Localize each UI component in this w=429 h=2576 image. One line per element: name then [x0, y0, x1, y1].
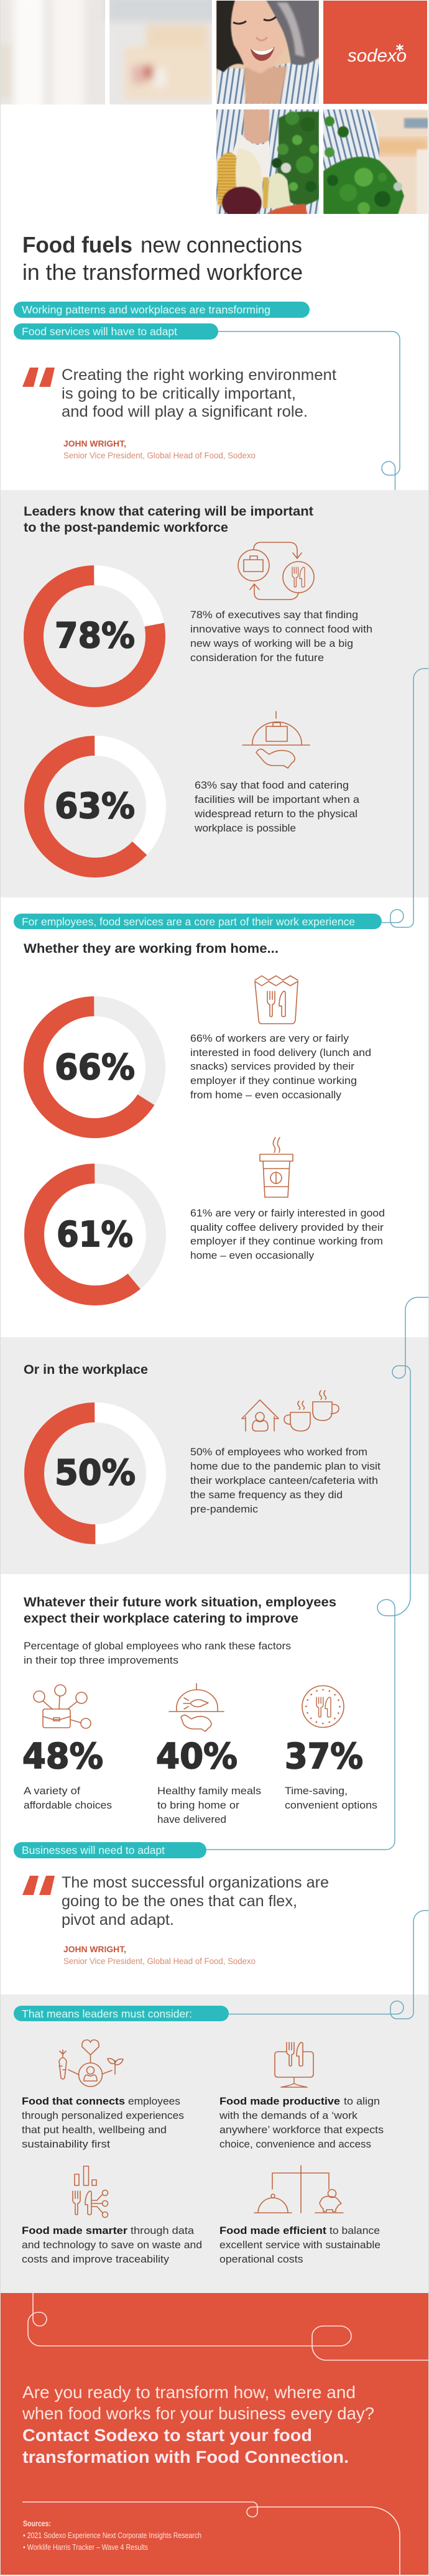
text: food made productive: [219, 2095, 384, 2150]
main title: new connections: [141, 232, 302, 257]
text: 50% of employees: the same frequency as they did: [190, 1489, 343, 1501]
text: 61% are very: employer if they continue working from: [190, 1235, 383, 1247]
text: 50% of employees: [190, 1446, 381, 1515]
photo tile: herbs and kitchen background: [323, 109, 429, 218]
text: food that connects: sustainability first: [22, 2138, 110, 2150]
text: food that connects: Food that connects: [22, 2095, 125, 2107]
logo tile: sodexo: [323, 1, 427, 104]
icon: home and coffee cups: [242, 1391, 339, 1431]
donut chart: 66%: 66%: [55, 1047, 135, 1088]
heading: or in the workplace: Or in the workplace: [24, 1363, 148, 1377]
text: 61% are very: [190, 1207, 385, 1261]
pill: food services: Food services will have to adapt: [22, 325, 177, 338]
donut chart: 63%: 63%: [55, 786, 135, 827]
text: 78% of executives: new ways of working will be a big: [190, 637, 353, 649]
text: 66% of workers: [190, 1032, 371, 1101]
panel: call to action: [1, 2293, 428, 2575]
text: percentage description: [24, 1640, 291, 1666]
stat: 40%: [156, 1684, 261, 1825]
connector line: top of call to action: [28, 2293, 428, 2360]
text: sources: [23, 2519, 201, 2552]
pill: employees: For employees, food services are a core part of their work experience: [22, 915, 355, 928]
text: food made productive: Food made productive: [219, 2095, 340, 2107]
text: food that connects: employees: [128, 2095, 180, 2107]
main title: Food fuels: [22, 232, 132, 257]
stat: 37%: 37%: [285, 1736, 363, 1777]
text: 63% say: workplace is possible: [194, 822, 296, 834]
text: food made efficient: excellent service with sustainable: [219, 2239, 381, 2251]
stat: 40%: Healthy family meals: [157, 1785, 261, 1797]
donut chart: 61%: 61%: [57, 1215, 133, 1255]
text: 63% say: [194, 779, 360, 834]
pill: working patterns: Working patterns and workplaces are transforming: [22, 303, 270, 316]
text: food made smarter: [22, 2225, 202, 2265]
text: call to action: [22, 2383, 374, 2467]
text: food made smarter: Food made smarter: [22, 2225, 127, 2236]
photo grid: woman holding fresh vegetables: [0, 0, 429, 219]
icon: plate with cutlery: [302, 1685, 344, 1728]
text: food that connects: through personalized experiences: [22, 2110, 184, 2121]
text: food made smarter: and technology to save on waste and: [22, 2239, 202, 2251]
text: food made efficient: [219, 2225, 381, 2265]
text: sources: Sources:: [23, 2519, 51, 2528]
text: call to action: when food works for your business every day?: [22, 2404, 374, 2423]
text: 63% say: widespread return to the physical: [194, 808, 358, 820]
connector line: to employees pill: [382, 669, 429, 927]
connector line: quote to leaders section: [218, 331, 429, 543]
text: 66% of workers: 66% of workers are very or fairly: [190, 1032, 349, 1044]
pill: leaders must consider: That means leaders must consider:: [22, 2008, 192, 2020]
photo tile: smiling woman: [216, 0, 319, 106]
text: food made smarter: costs and improve traceability: [22, 2253, 170, 2265]
icon: quote mark: [22, 1876, 55, 1895]
icon: carrot under cloche: [169, 1684, 224, 1731]
text: 78% of executives: 78% of executives say that finding: [190, 609, 358, 621]
quote 2: going to be the ones that can flex,: [62, 1893, 297, 1910]
stat: 48%: affordable choices: [24, 1799, 112, 1811]
quote 2: Senior Vice President, Global Head of Food, Sodexo: [63, 1956, 256, 1966]
pill: businesses: [14, 1842, 206, 1858]
donut chart: 63%: [34, 746, 156, 868]
photo tile: curtain: [1, 0, 105, 104]
text: 50% of employees: their workplace canteen/cafeteria with: [190, 1475, 378, 1486]
heading: leaders: Leaders know that catering will be important: [24, 504, 313, 519]
quote 1: and food will play a significant role.: [62, 403, 308, 420]
text: sources: • Worklife Harris Tracker – Wave 4 Results: [23, 2543, 148, 2552]
text: sources: • 2021 Sodexo Experience Next Corporate Insights Research: [23, 2531, 201, 2540]
text: percentage description: in their top three improvements: [24, 1654, 178, 1666]
text: food made productive: with the demands of a ‘work: [219, 2110, 358, 2121]
quote 2: [22, 1874, 329, 1966]
quote 1: is going to be critically important,: [62, 385, 296, 402]
text: 66% of workers: from home – even occasionally: [190, 1089, 342, 1101]
icon: work and food exchange: [238, 542, 314, 600]
connector line: workplace to businesses pill: [206, 1297, 429, 1850]
heading: leaders: to the post-pandemic workforce: [24, 521, 228, 535]
text: 66% of workers: snacks) services provided by their: [190, 1060, 354, 1072]
quote 2: The most successful organizations are: [62, 1874, 329, 1891]
text: 61% are very: 61% are very or fairly interested in good: [190, 1207, 385, 1219]
icon: food bag: [255, 976, 298, 1024]
icon: person with heart, carrot and sprout: [59, 2040, 123, 2087]
donut chart: 50%: [34, 1412, 156, 1534]
text: 78% of executives: innovative ways to connect food with: [190, 623, 372, 635]
text: food that connects: [22, 2095, 184, 2150]
text: 61% are very: home – even occasionally: [190, 1249, 314, 1261]
stat: 37%: Time-saving,: [285, 1785, 348, 1797]
stat: 40%: to bring home or: [157, 1799, 239, 1811]
stat: 48%: A variety of: [24, 1785, 80, 1797]
stat: 40%: 40%: [156, 1736, 238, 1777]
icon: briefcase network: [34, 1685, 91, 1728]
text: 63% say: facilities will be important when a: [195, 794, 360, 805]
text: 50% of employees: 50% of employees who worked from: [190, 1446, 367, 1458]
icon: bars and smart cutlery: [73, 2166, 108, 2218]
stat: 37%: convenient options: [285, 1799, 377, 1811]
photo tile: vegetables in arms: [216, 109, 319, 219]
donut chart: 66%: [34, 1006, 155, 1128]
donut chart: 78%: 78%: [55, 616, 135, 656]
icon: balance scale with cloche and piggy bank: [254, 2166, 343, 2213]
logo tile: sodexo: sodexo: [348, 46, 407, 66]
quote 1: Senior Vice President, Global Head of Food, Sodexo: [63, 450, 256, 460]
quote 1: JOHN WRIGHT,: [63, 438, 126, 448]
text: food that connects: that put health, wellbeing and: [22, 2124, 167, 2136]
quote 2: pivot and adapt.: [62, 1911, 174, 1929]
text: food made productive: anywhere’ workforce that expects: [219, 2124, 384, 2136]
donut chart: 61%: [34, 1174, 156, 1295]
text: 78% of executives: consideration for the future: [190, 652, 324, 664]
quote 2: JOHN WRIGHT,: [63, 1944, 126, 1954]
text: 50% of employees: pre-pandemic: [190, 1503, 259, 1515]
main title: in the transformed workforce: [22, 259, 303, 285]
heading: future work situation: [24, 1595, 336, 1626]
quote 1: Creating the right working environment: [62, 366, 336, 384]
text: 78% of executives: [190, 609, 372, 664]
panel: leaders must consider: [1, 1911, 429, 2293]
text: 63% say: 63% say that food and catering: [195, 779, 349, 791]
text: food made efficient: operational costs: [219, 2253, 303, 2265]
text: 66% of workers: interested in food delivery (lunch and: [190, 1047, 371, 1059]
pill: working patterns: [14, 302, 310, 318]
donut chart: 78%: [34, 575, 155, 697]
text: percentage description: Percentage of global employees who rank these factors: [24, 1640, 291, 1652]
icon: briefcase under cloche: [242, 711, 310, 768]
heading: leaders: [24, 504, 313, 535]
main title: [22, 232, 303, 285]
heading: future work situation: Whatever their future work situation, employees: [24, 1595, 336, 1610]
panel: leaders: [1, 490, 428, 897]
pill: businesses: Businesses will need to adapt: [22, 1844, 165, 1856]
text: call to action: Are you ready to transform how, where and: [22, 2383, 356, 2402]
stat: 37%: [285, 1685, 377, 1811]
icon: cutlery on monitor: [275, 2042, 313, 2087]
text: food made smarter: through data: [131, 2225, 195, 2236]
donut chart: 50%: 50%: [55, 1453, 136, 1493]
text: 50% of employees: home due to the pandemic plan to visit: [190, 1460, 381, 1472]
text: food made efficient: Food made efficient: [219, 2225, 326, 2236]
text: 66% of workers: employer if they continue working: [190, 1075, 357, 1086]
quote 1: [22, 366, 336, 460]
text: food made productive: choice, convenience and access: [219, 2138, 371, 2150]
panel: in the workplace: [1, 1337, 428, 1574]
pill: leaders must consider: [14, 2006, 229, 2021]
icon: quote mark: [22, 368, 55, 387]
stat: 48%: 48%: [22, 1736, 103, 1777]
stat: 40%: have delivered: [157, 1814, 226, 1825]
heading: future work situation: expect their workplace catering to improve: [24, 1611, 298, 1626]
connector line: bottom of call to action: [22, 2502, 400, 2575]
connector line: to consider pill: [229, 1911, 429, 2019]
photo tile: blurred kitchen shelves: [104, 0, 212, 104]
stat: 48%: [22, 1685, 112, 1811]
text: call to action: Contact Sodexo to start your food: [22, 2425, 312, 2445]
icon: coffee cup: [260, 1137, 293, 1197]
heading: working from home: Whether they are working from home...: [24, 942, 279, 956]
text: food made efficient: to balance: [330, 2225, 380, 2236]
text: call to action: transformation with Food Connection.: [22, 2447, 349, 2467]
text: 61% are very: quality coffee delivery provided by their: [190, 1221, 384, 1233]
text: food made productive: to align: [344, 2095, 380, 2107]
pill: food services: [14, 323, 218, 340]
